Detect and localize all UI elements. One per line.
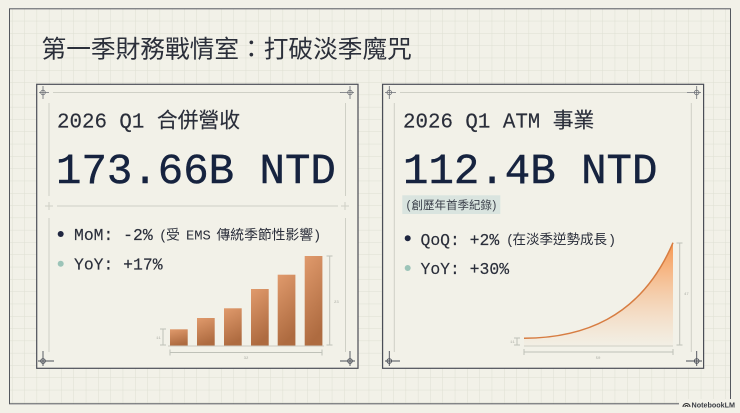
record badge: 創歷年首季紀錄 [412,198,492,212]
bar chart: 11 [156,337,161,341]
bullet: QoQ: QoQ: +2% [420,231,499,250]
record badge [402,195,500,214]
bullet: MoM: 受 [166,228,180,244]
bullet: MoM: ) [313,228,321,244]
bullet: QoQ: ) [608,234,616,249]
panel heading: 2026 Q1 合併營收 [57,110,240,134]
record badge: ) [492,200,496,212]
panel: ATM business [383,84,704,368]
area curve chart: 50 [596,357,601,361]
bar chart: 32 [244,357,249,361]
bar chart [156,256,339,361]
bullet: MoM: ( [159,228,167,244]
blueprint marks [385,86,702,366]
panel heading: 2026 Q1 ATM 事業 [403,110,594,134]
title: 第一季財務戰情室：打破淡季魔咒 [42,36,412,64]
area curve chart: 11 [510,341,515,345]
area curve chart [510,243,689,361]
watermark: NotebookLM [679,399,739,410]
bullet: QoQ [405,231,616,250]
panel: consolidated revenue [37,84,358,368]
bullet: MoM: MoM: -2% [74,226,153,245]
bullet: MoM [58,226,321,245]
bullet: YoY: YoY: +30% [420,260,509,279]
big number: 112.4B NTD [403,148,657,196]
big number: 173.66B NTD [56,148,336,196]
bullet: YoY: YoY: +17% [74,256,163,274]
record badge: ( [406,200,410,212]
bullet: MoM: 傳統季節性影響 [216,226,313,244]
bullet: QoQ: ( [506,234,514,249]
bullet: QoQ: 在淡季逆勢成長 [512,232,607,249]
watermark: NotebookLM: NotebookLM [692,400,735,410]
bullet: MoM: EMS [186,230,211,244]
area curve chart: 47 [684,293,689,297]
blueprint marks [38,86,355,366]
bar chart: 23 [334,301,339,305]
